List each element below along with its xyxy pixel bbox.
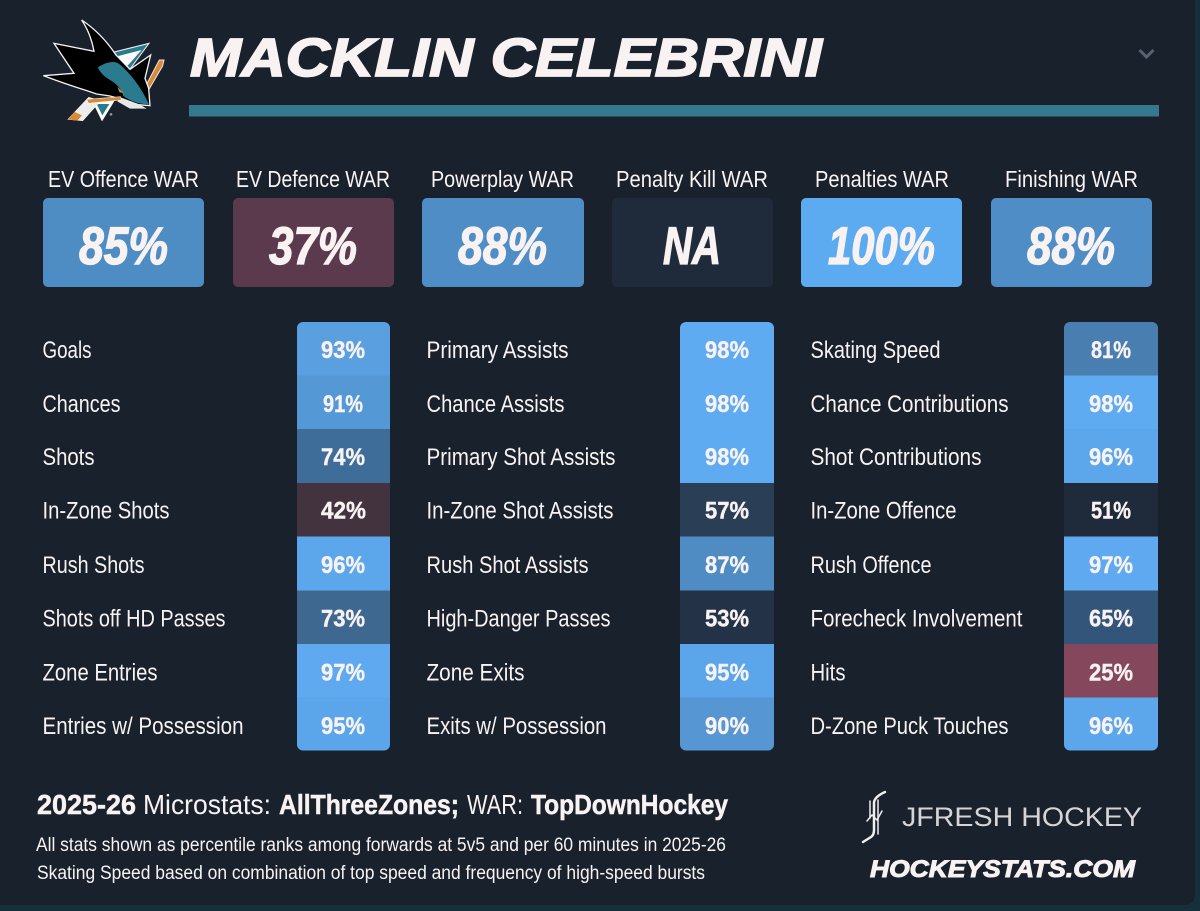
WAR card: EV Offence: EV Offence WAR — [48, 166, 199, 192]
row: Entries w/ Possession: 95% — [321, 713, 365, 740]
WAR card: Penalties: 100% — [828, 217, 935, 276]
row: Hits: 25% — [1089, 660, 1133, 686]
row: Entries w/ Possession — [42, 698, 390, 750]
row: Shots — [42, 429, 390, 483]
row: Rush Offence: 97% — [1089, 552, 1133, 579]
row: Goals — [42, 322, 390, 376]
row: In-Zone Shots — [42, 483, 390, 536]
row: Rush Shot Assists — [426, 536, 774, 590]
panel: WAR percentiles — [43, 166, 1152, 287]
WAR card: Penalties: Penalties WAR — [815, 166, 949, 192]
row: Chances: Chances — [42, 391, 120, 418]
WAR card: EV Defence: 37% — [269, 217, 357, 276]
row: Exits w/ Possession: 90% — [705, 713, 749, 740]
row: Shots off HD Passes: Shots off HD Passes — [42, 606, 226, 632]
row: Zone Entries: 97% — [321, 660, 365, 686]
row: D-Zone Puck Touches: 96% — [1089, 713, 1133, 740]
row: In-Zone Shots: In-Zone Shots — [42, 498, 170, 524]
row: Shots off HD Passes: 73% — [321, 606, 365, 632]
row: Rush Shot Assists: 87% — [705, 552, 749, 579]
row: Shots off HD Passes — [42, 590, 390, 644]
row: In-Zone Offence: In-Zone Offence — [810, 498, 956, 524]
row: Primary Assists: Primary Assists — [426, 337, 568, 364]
row: Entries w/ Possession: Entries w/ Possession — [42, 713, 244, 740]
row: In-Zone Shot Assists: In-Zone Shot Assists — [426, 498, 614, 524]
row: Zone Exits — [426, 644, 774, 698]
row: Forecheck Involvement: Forecheck Involvement — [810, 606, 1023, 632]
icon: chevron — [1140, 50, 1154, 57]
footer: data sources: WAR: — [467, 789, 523, 820]
WAR card: EV Defence: EV Defence WAR — [236, 166, 390, 192]
row: D-Zone Puck Touches: D-Zone Puck Touches — [810, 713, 1008, 740]
row: Chances: 91% — [323, 391, 363, 418]
row: High-Danger Passes: High-Danger Passes — [426, 606, 610, 632]
panel: shooting and transition column — [42, 322, 390, 750]
row: Chance Assists: 98% — [705, 391, 749, 418]
WAR card: EV Defence — [233, 166, 394, 287]
row: Zone Exits: 95% — [705, 660, 749, 686]
WAR card: EV Offence: 85% — [79, 217, 168, 276]
row: Primary Assists — [426, 322, 774, 376]
row: In-Zone Offence — [810, 483, 1158, 536]
row: High-Danger Passes: 53% — [705, 606, 749, 632]
title underline bar — [189, 105, 1159, 116]
row: Zone Entries: Zone Entries — [42, 660, 158, 686]
brand: hockeystats.com: HOCKEYSTATS.COM — [870, 856, 1136, 883]
title: MACKLIN CELEBRINI — [190, 28, 823, 88]
row: Primary Shot Assists: Primary Shot Assists — [426, 444, 616, 471]
row: Forecheck Involvement — [810, 590, 1158, 644]
row: In-Zone Shot Assists — [426, 483, 774, 536]
row: D-Zone Puck Touches — [810, 698, 1158, 750]
row: Shots: Shots — [42, 444, 94, 471]
WAR card: Powerplay — [422, 166, 584, 287]
row: Chance Contributions: 98% — [1089, 391, 1133, 418]
row: Goals: Goals — [42, 337, 92, 364]
row: Chance Assists: Chance Assists — [426, 391, 564, 418]
icon: JFresh crossed sticks logo — [863, 792, 885, 842]
panel: passing column — [426, 322, 774, 750]
row: Skating Speed: 81% — [1091, 337, 1131, 364]
WAR card: Finishing: 88% — [1027, 217, 1115, 276]
footer: notes: Skating Speed based on combination of top speed and frequency of high-speed bursts — [37, 863, 705, 884]
row: Zone Exits: Zone Exits — [426, 660, 524, 686]
icon: San Jose Sharks logo — [43, 20, 164, 121]
row: Goals: 93% — [321, 337, 365, 364]
footer: data sources: AllThreeZones; — [279, 789, 459, 820]
row: Primary Assists: 98% — [705, 337, 749, 364]
row: Exits w/ Possession: Exits w/ Possession — [426, 713, 606, 740]
footer: data sources: 2025-26 — [37, 789, 136, 820]
row: Shot Contributions — [810, 429, 1158, 483]
panel: skating and offence column — [810, 322, 1158, 750]
footer: data sources: Microstats: — [143, 789, 271, 820]
row: Rush Offence — [810, 536, 1158, 590]
row: Rush Shot Assists: Rush Shot Assists — [426, 552, 588, 579]
row: Rush Offence: Rush Offence — [810, 552, 932, 579]
row: Primary Shot Assists: 98% — [705, 444, 749, 471]
row: High-Danger Passes — [426, 590, 774, 644]
row: Rush Shots — [42, 536, 390, 590]
WAR card: Penalty Kill: NA — [663, 217, 721, 276]
brand: JFresh Hockey: JFRESH HOCKEY — [902, 802, 1142, 832]
WAR card: Finishing: Finishing WAR — [1005, 166, 1138, 192]
row: Skating Speed: Skating Speed — [810, 337, 940, 364]
footer: notes: All stats shown as percentile ranks among forwards at 5v5 and per 60 minutes in 2025-26 — [36, 835, 726, 856]
WAR card: Finishing — [991, 166, 1152, 287]
footer: data sources: TopDownHockey — [531, 789, 729, 820]
row: Chance Assists — [426, 376, 774, 429]
row: Shot Contributions: 96% — [1089, 444, 1133, 471]
WAR card: Powerplay: 88% — [458, 217, 547, 276]
row: Shot Contributions: Shot Contributions — [810, 444, 982, 471]
WAR card: Powerplay: Powerplay WAR — [431, 166, 574, 192]
WAR card: EV Offence — [43, 166, 204, 287]
row: Rush Shots: 96% — [321, 552, 365, 579]
row: In-Zone Shots: 42% — [321, 498, 366, 524]
WAR card: Penalty Kill — [612, 166, 773, 287]
row: Hits — [810, 644, 1158, 698]
row: Chance Contributions: Chance Contributions — [810, 391, 1008, 418]
footer: data sources — [37, 789, 729, 820]
row: Chance Contributions — [810, 376, 1158, 429]
row: Shots: 74% — [321, 444, 365, 471]
row: Rush Shots: Rush Shots — [42, 552, 144, 579]
footer: notes — [36, 835, 726, 884]
row: In-Zone Shot Assists: 57% — [705, 498, 749, 524]
row: Skating Speed — [810, 322, 1158, 376]
row: Chances — [42, 376, 390, 429]
row: Primary Shot Assists — [426, 429, 774, 483]
WAR card: Penalties — [801, 166, 962, 287]
row: Forecheck Involvement: 65% — [1089, 606, 1133, 632]
row: In-Zone Offence: 51% — [1091, 498, 1131, 524]
row: Exits w/ Possession — [426, 698, 774, 750]
WAR card: Penalty Kill: Penalty Kill WAR — [616, 166, 768, 192]
row: Zone Entries — [42, 644, 390, 698]
row: Hits: Hits — [810, 660, 846, 686]
